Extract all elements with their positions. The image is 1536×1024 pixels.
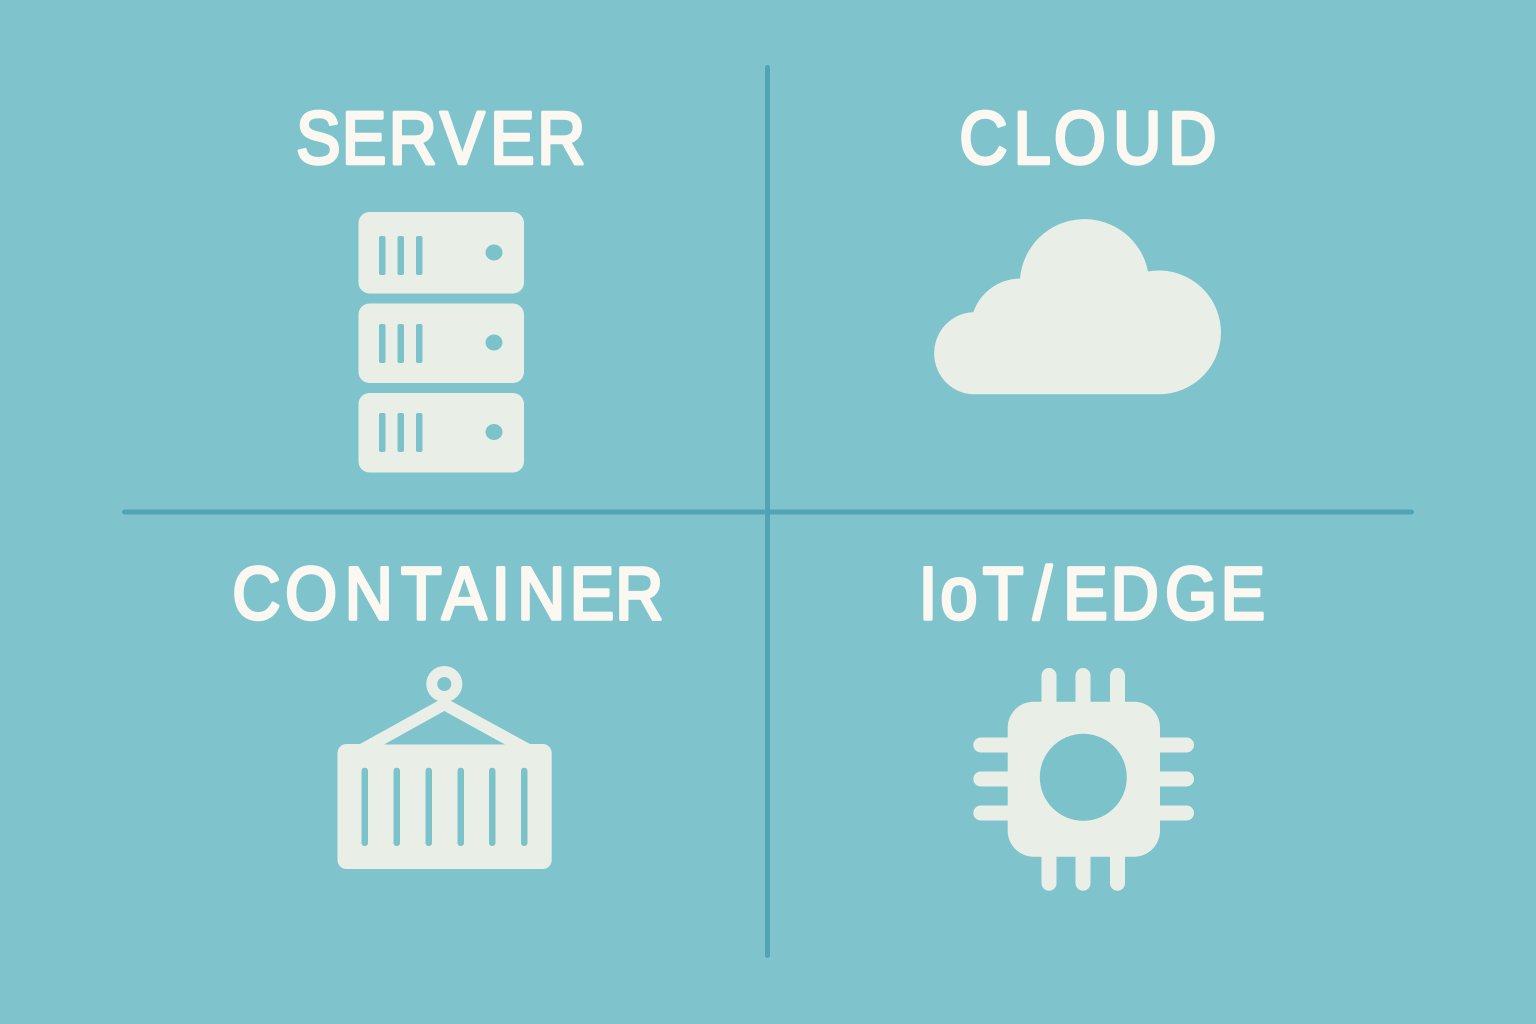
icon: microchip — [973, 668, 1194, 891]
heading: server: SERVER — [296, 96, 585, 179]
heading: container: CONTAINER — [232, 552, 663, 635]
icon: server stack — [358, 212, 524, 472]
heading: iot/edge: IoT/EDGE — [919, 552, 1265, 635]
heading: cloud: CLOUD — [959, 96, 1216, 179]
icon: shipping container — [338, 672, 552, 869]
icon: cloud — [934, 219, 1221, 394]
